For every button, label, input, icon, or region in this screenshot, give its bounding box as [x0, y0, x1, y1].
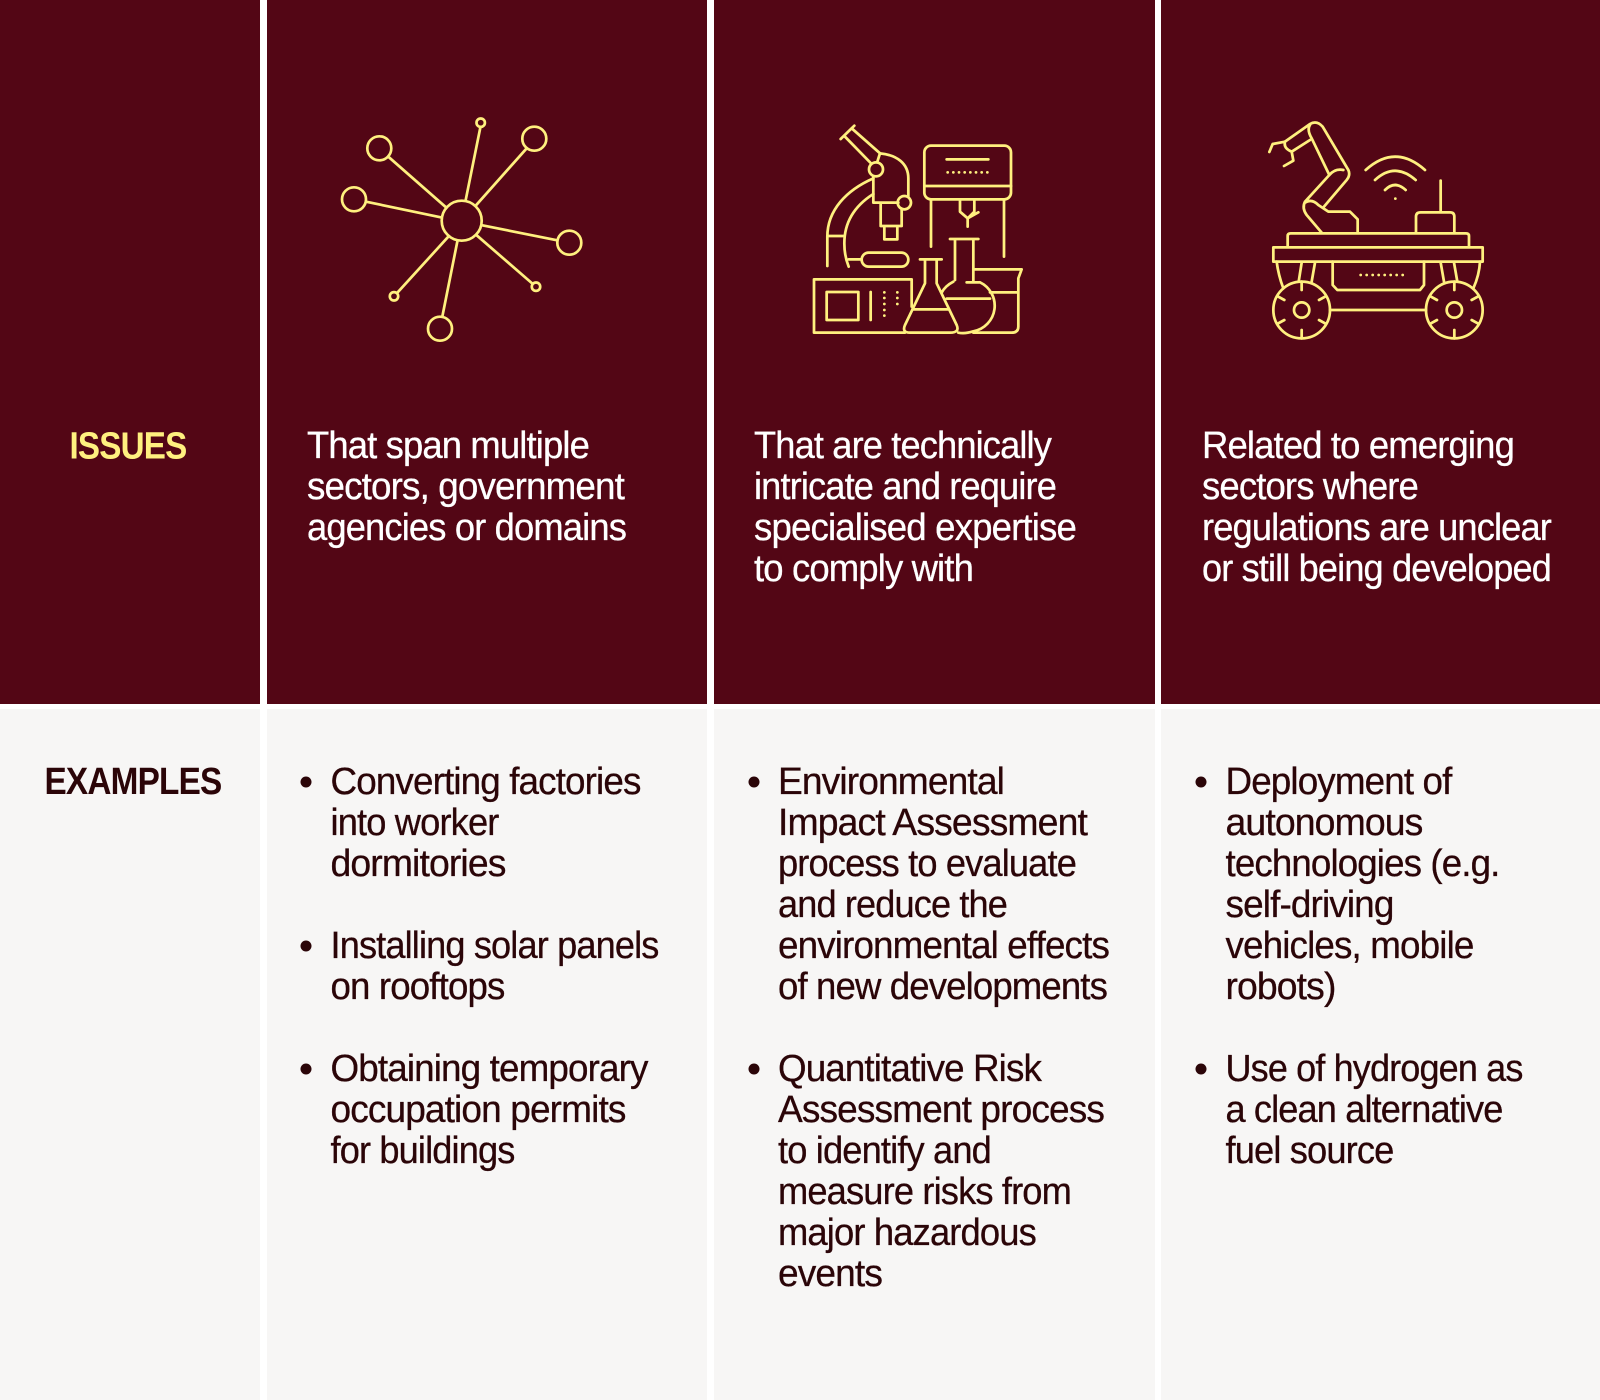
list item: environmental impact assessment: and reduce the — [778, 884, 1007, 926]
list item: hydrogen fuel: fuel source — [1226, 1130, 1394, 1172]
text: issue description column 1 — [307, 425, 626, 549]
panel: row label issues — [0, 0, 260, 704]
text: issue description column 3: regulations are unclear — [1202, 507, 1552, 549]
heading: ISSUES: ISSUES — [70, 426, 186, 468]
list item: quantitative risk assessment: to identify and — [778, 1130, 991, 1172]
text: issue description column 3 — [1202, 425, 1552, 590]
list item: environmental impact assessment: Impact Assessment — [778, 802, 1088, 844]
list item: quantitative risk assessment — [748, 1048, 1104, 1295]
list item: temporary occupation permits: Obtaining temporary — [330, 1048, 648, 1090]
list item: installing solar panels: Installing solar panels — [330, 925, 658, 967]
list item: installing solar panels: on rooftops — [330, 966, 504, 1008]
list item: environmental impact assessment: process to evaluate — [778, 843, 1076, 885]
text: issue description column 3: or still being developed — [1202, 548, 1551, 590]
list item: autonomous technologies: autonomous — [1226, 802, 1422, 844]
text: issue description column 1: sectors, government — [307, 466, 625, 508]
list item: hydrogen fuel: a clean alternative — [1226, 1089, 1502, 1131]
list item: temporary occupation permits: occupation permits — [330, 1089, 626, 1131]
panel: issue column 2 — [714, 0, 1155, 704]
list item: installing solar panels — [300, 925, 658, 1008]
icon: network of nodes — [342, 118, 581, 341]
list item: quantitative risk assessment: Assessment process — [778, 1089, 1104, 1131]
list item: converting factories — [300, 761, 640, 885]
list item: environmental impact assessment: Environmental — [778, 761, 1004, 803]
text: issue description column 2: That are technically — [754, 425, 1052, 467]
list item: quantitative risk assessment: measure risks from — [778, 1171, 1071, 1213]
list item: autonomous technologies: vehicles, mobile — [1226, 925, 1474, 967]
list item: quantitative risk assessment: major hazardous — [778, 1212, 1036, 1254]
list item: temporary occupation permits — [300, 1048, 648, 1172]
list item: quantitative risk assessment: Quantitative Risk — [778, 1048, 1043, 1090]
list item: autonomous technologies: Deployment of — [1226, 761, 1453, 803]
panel: examples column 1 — [267, 709, 707, 1400]
list item: hydrogen fuel — [1196, 1048, 1522, 1172]
list item: autonomous technologies: self-driving — [1226, 884, 1394, 926]
list item: environmental impact assessment — [748, 761, 1109, 1008]
list item: environmental impact assessment: of new developments — [778, 966, 1107, 1008]
list item: converting factories: into worker — [330, 802, 500, 844]
icon: laboratory equipment — [814, 126, 1022, 333]
list item: hydrogen fuel: Use of hydrogen as — [1226, 1048, 1522, 1090]
text: issue description column 2: specialised expertise — [754, 507, 1076, 549]
list item: autonomous technologies: robots) — [1226, 966, 1336, 1008]
text: issue description column 3: sectors where — [1202, 466, 1418, 508]
text: issue description column 2 — [754, 425, 1076, 590]
list item: quantitative risk assessment: events — [778, 1253, 882, 1295]
panel: issue column 1 — [267, 0, 707, 704]
list item: converting factories: dormitories — [330, 843, 506, 885]
panel: row label examples — [0, 709, 260, 1400]
list item: environmental impact assessment: environmental effects — [778, 925, 1109, 967]
text: issue description column 1: That span multiple — [307, 425, 589, 467]
panel: examples column 2 — [714, 709, 1155, 1400]
panel: issue column 3 — [1161, 0, 1600, 704]
heading: EXAMPLES: EXAMPLES — [44, 761, 222, 803]
list item: converting factories: Converting factories — [330, 761, 640, 803]
text: issue description column 2: to comply with — [754, 548, 973, 590]
text: issue description column 3: Related to emerging — [1202, 425, 1514, 467]
list item: autonomous technologies: technologies (e.g. — [1226, 843, 1500, 885]
panel: examples column 3 — [1161, 709, 1600, 1400]
text: issue description column 1: agencies or domains — [307, 507, 626, 549]
icon: robot rover with arm — [1269, 122, 1483, 338]
list item: temporary occupation permits: for buildings — [330, 1130, 514, 1172]
list item: autonomous technologies — [1196, 761, 1500, 1008]
text: issue description column 2: intricate and require — [754, 466, 1056, 508]
